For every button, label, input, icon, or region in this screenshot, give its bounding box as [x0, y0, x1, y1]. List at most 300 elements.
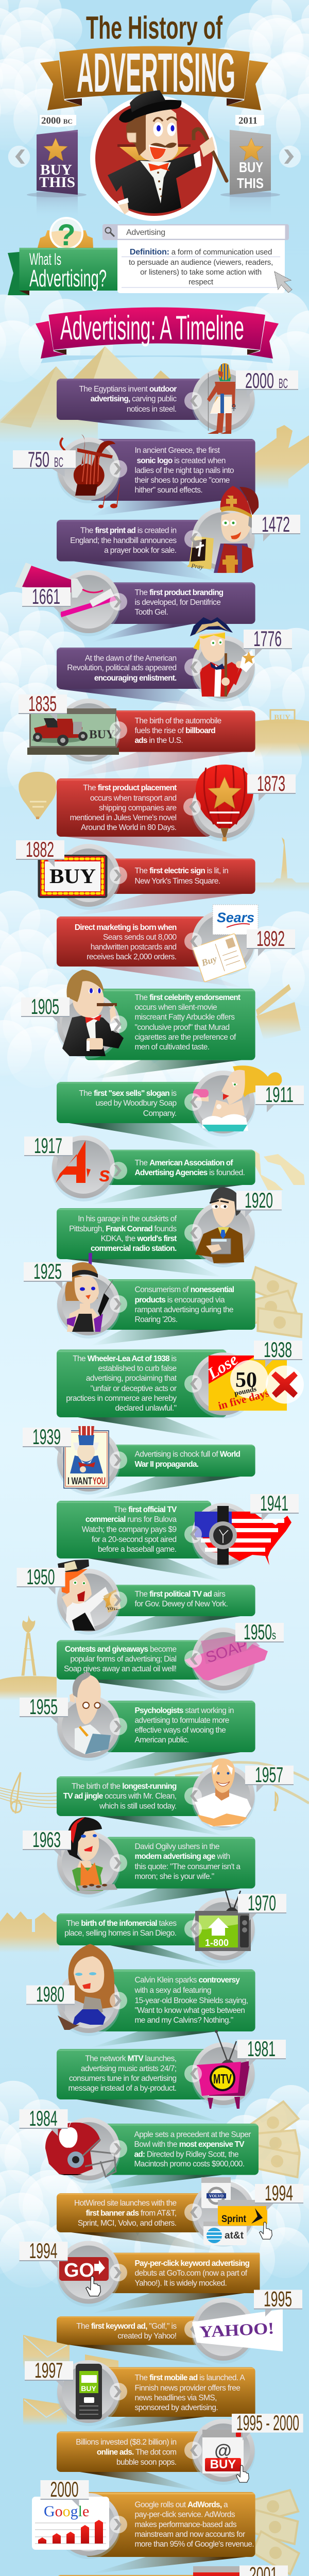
- icon: diet advert: 50: [235, 1368, 257, 1392]
- date label: 2000: [50, 2477, 78, 2501]
- text: cigarettes are the preference of: [135, 1033, 236, 1042]
- text: Pittsburgh, Frank Conrad founds: [69, 1225, 177, 1233]
- date label: 1957: [255, 1762, 283, 1787]
- text: Contests and giveaways become: [65, 1645, 176, 1654]
- event: 1981: [57, 2030, 286, 2109]
- text: Calvin Klein sparks controversy: [135, 1976, 240, 1985]
- text: The first print ad is created in: [80, 527, 176, 535]
- icon: diet advert: [203, 1350, 287, 1412]
- connector: [91, 2175, 222, 2191]
- text: miscreant Fatty Arbuckle offers: [135, 1013, 235, 1022]
- text: [135, 1706, 234, 1744]
- text: "Want to know what gets between: [135, 2006, 245, 2015]
- flag: buy this 2011: THIS: [237, 175, 264, 191]
- text: Psychologists start working in: [135, 1706, 234, 1715]
- text: [67, 654, 177, 683]
- text: practices in commerce are hereby: [66, 1394, 177, 1403]
- icon: bishop: Pray: [191, 562, 204, 570]
- icon: housewife: [66, 1817, 117, 1891]
- icon: psychologist: [70, 1672, 111, 1754]
- text: The first keyword ad, "Golf," is: [76, 2322, 177, 2331]
- event: 1925: [24, 1253, 255, 1338]
- panel: [103, 2124, 259, 2175]
- text: commercial runs for Bulova: [85, 1515, 177, 1524]
- text: moron; she is your wife.": [135, 1872, 214, 1881]
- text: [64, 1645, 177, 1673]
- text: with a sexy ad featuring: [134, 1986, 211, 1995]
- text: Yahoo!). It is widely mocked.: [135, 2279, 227, 2287]
- date label: [40, 2477, 89, 2507]
- event: 1995-2000: [57, 2411, 303, 2485]
- text: men of cultivated taste.: [135, 1043, 209, 1052]
- text: The first mobile ad is launched. A: [135, 2374, 245, 2382]
- connector: [91, 1477, 241, 1500]
- icon: Uncle Sam poster: YOU: [93, 1476, 106, 1487]
- connector: [91, 501, 220, 516]
- event: 2000: [32, 2477, 255, 2559]
- scenery: envelopes: [23, 2335, 118, 2426]
- text: [74, 2199, 176, 2228]
- text: Macintosh promo costs $900,000.: [134, 2160, 245, 2168]
- date label: [254, 2286, 302, 2316]
- event: 1776: [57, 617, 292, 702]
- date label: [252, 512, 300, 541]
- icon: billboard with car: BUY: [89, 728, 115, 741]
- panel: [89, 439, 255, 501]
- scenery: oil well: [0, 1615, 57, 1700]
- date label: [250, 1491, 299, 1521]
- panel: [57, 379, 206, 420]
- text: hither" sound effects.: [135, 486, 202, 495]
- text: occurs when transport and: [90, 794, 176, 803]
- icon: radio man: [195, 1187, 244, 1263]
- date label: 1994: [29, 2239, 58, 2263]
- text: ladies of the night tap nails into: [135, 466, 234, 475]
- text: [135, 1159, 245, 1177]
- event: 1873: [57, 765, 296, 841]
- date label: [22, 584, 71, 614]
- text: established to curb false: [98, 1364, 176, 1373]
- date label: [255, 2181, 303, 2211]
- text: for a 20-second spot aired: [92, 1535, 176, 1544]
- date label: [247, 771, 296, 801]
- icon: @ buy window: BUY: [210, 2458, 236, 2471]
- icon: television: [195, 1891, 251, 1951]
- text: ad: Directed by Ridley Scott, the: [134, 2150, 238, 2159]
- panel: [57, 1350, 227, 1417]
- panel: definition search box: [102, 224, 292, 293]
- date label: 1955: [29, 1694, 58, 1719]
- date label: [237, 2037, 286, 2066]
- date label: [255, 1082, 304, 1112]
- date label: BC: [54, 454, 63, 470]
- panel: [85, 989, 255, 1060]
- event: 2001: [57, 2563, 288, 2576]
- text: makes performance-based ads: [135, 2520, 237, 2529]
- panel: [106, 1837, 255, 1889]
- connector: [65, 752, 244, 778]
- event: 1892: [57, 905, 295, 982]
- icon: red pop-up: [193, 2566, 243, 2576]
- event: 1963: [23, 1817, 255, 1897]
- text: [66, 1354, 177, 1413]
- icon: soap bar: SOAP: [204, 1636, 250, 1667]
- icon: cursor: [274, 272, 292, 293]
- text: declared unlawful.": [115, 1404, 177, 1413]
- text: The first electric sign is lit, in: [135, 867, 228, 875]
- date label: 1882: [26, 837, 54, 861]
- date label: [23, 1827, 71, 1857]
- icon: billboard with car: [27, 708, 119, 755]
- text: modern advertising age with: [135, 1852, 230, 1861]
- icon: Uncle Sam poster: I WANT: [67, 1476, 92, 1487]
- text: encouraging enlistment.: [94, 674, 177, 683]
- connector: [69, 894, 243, 917]
- event: 1661: [15, 563, 255, 636]
- text: [69, 1215, 177, 1253]
- scenery: pyramids: [0, 346, 170, 443]
- event: 1995 Yahoo: [57, 2286, 302, 2364]
- date label: 1939: [32, 1425, 61, 1449]
- text: products is encouraged via: [135, 1296, 225, 1304]
- text: At the dawn of the American: [85, 654, 176, 663]
- text: Tooth Gel.: [135, 608, 168, 617]
- event: 1984: [20, 2106, 259, 2183]
- icon: Sprint banner: Sprint: [221, 2214, 247, 2225]
- date label: [24, 1133, 73, 1163]
- icon: lyre and notes: [61, 434, 119, 508]
- text: first banner ads from AT&T,: [86, 2209, 176, 2217]
- event: 1950: [16, 1560, 255, 1635]
- text: [135, 2374, 245, 2412]
- text: TV ad jingle occurs with Mr. Clean,: [63, 1792, 176, 1801]
- flag: buy this 2011: [220, 130, 280, 219]
- text: before a baseball game.: [98, 1545, 176, 1554]
- text: [64, 1919, 177, 1938]
- event: 1994 pay-per-click: [20, 2239, 260, 2307]
- panel: [57, 1208, 211, 1259]
- panel: [57, 1082, 211, 1123]
- date label: [247, 926, 295, 956]
- date label: 2000: [245, 368, 274, 393]
- event: 1980: [26, 1944, 255, 2036]
- ribbon: what is advertising: What Is: [29, 250, 61, 268]
- date label: 1980: [36, 1982, 64, 2006]
- icon: MTV television: [197, 2030, 250, 2109]
- arrow: previous: [8, 146, 30, 167]
- text: [79, 1089, 177, 1118]
- icon: Sears stamp: [213, 905, 258, 935]
- scenery: clapperboard: [256, 984, 301, 1040]
- panel: [57, 1776, 211, 1816]
- icon: colonial soldier: [190, 617, 255, 697]
- connector: [98, 1816, 225, 1836]
- ribbon: what is advertising: Advertising?: [29, 265, 107, 292]
- text: [135, 717, 221, 745]
- icon: Sears stamp: Sears: [217, 910, 254, 925]
- arrow: next: [279, 146, 301, 167]
- connector: [71, 2232, 222, 2252]
- text: The birth of the automobile: [135, 717, 221, 725]
- definition text: or listeners) to take some action with: [140, 268, 262, 277]
- icon: 4A's logo: s: [99, 1163, 110, 1186]
- text: In ancient Greece, the first: [135, 446, 220, 455]
- text: [135, 588, 224, 617]
- scenery: money: [248, 2489, 301, 2574]
- panel: [57, 520, 206, 562]
- text: shipping companies are: [99, 804, 176, 812]
- icon: soap bar: [184, 1634, 268, 1681]
- definition text: [117, 240, 285, 293]
- icon: AT&T banner: [203, 2222, 247, 2245]
- text: The birth of the infomercial takes: [66, 1919, 177, 1928]
- event: 1941: [57, 1491, 299, 1569]
- text: HotWired site launches with the: [74, 2199, 176, 2208]
- date label: 1776: [253, 626, 282, 651]
- text: [79, 385, 177, 414]
- text: The Egyptians invent outdoor: [79, 385, 177, 394]
- panel: [106, 2367, 255, 2417]
- text: Around the World in 80 Days.: [81, 823, 176, 832]
- text: In his garage in the outskirts of: [78, 1215, 177, 1223]
- connector: [65, 837, 245, 858]
- scenery: hands: [254, 1150, 305, 1190]
- date label: 1892: [256, 926, 285, 951]
- text: Consumerism of nonessential: [135, 1285, 234, 1294]
- panel: [106, 1445, 255, 1477]
- icon: 4A's logo: [56, 1141, 110, 1186]
- text: The American Association of: [135, 1159, 233, 1167]
- icon: Volvo banner: [201, 2177, 231, 2208]
- ribbon: Advertising: [40, 41, 268, 110]
- date label: [238, 1891, 286, 1921]
- connector: [91, 1616, 241, 1639]
- icon: Mr. Clean: [194, 1758, 251, 1826]
- text: [134, 1976, 248, 2025]
- text: sponsored by advertising.: [135, 2403, 218, 2412]
- icon: hot-air balloon: [196, 765, 253, 841]
- event: 1917: [24, 1133, 255, 1201]
- date label: [16, 837, 64, 867]
- badge: question mark: [38, 217, 93, 252]
- text: commercial radio station.: [91, 1244, 177, 1253]
- text: Soap gives away an actual oil well!: [64, 1665, 176, 1673]
- connector: [91, 2031, 217, 2047]
- date label: [239, 2563, 288, 2576]
- date label: [13, 447, 76, 477]
- icon: mobile phone: [76, 2364, 102, 2419]
- text: online ads. The dot com: [97, 2448, 176, 2456]
- text: used by Woodbury Soap: [96, 1099, 176, 1108]
- panel: [85, 2492, 255, 2557]
- text: Company.: [143, 1109, 176, 1118]
- date label: 1472: [262, 512, 290, 536]
- text: "unfair or deceptive acts or: [90, 1384, 177, 1393]
- text: [134, 2130, 251, 2168]
- date label: 1925: [33, 1259, 62, 1283]
- connector: [69, 1123, 221, 1149]
- date label: [236, 1188, 282, 1217]
- date label: [21, 994, 70, 1024]
- date tag: 2011: [235, 115, 264, 127]
- title: [40, 10, 268, 110]
- connector: [72, 561, 217, 581]
- icon: go button: GO: [64, 2260, 94, 2281]
- text: ads in the U.S.: [135, 736, 183, 745]
- date label: 1917: [34, 1133, 62, 1158]
- text: Advertising is chock full of World: [135, 1450, 240, 1459]
- text: Pay-per-click keyword advertising: [135, 2259, 250, 2268]
- text: message instead of a by-product.: [68, 2084, 176, 2093]
- text: The first product branding: [135, 588, 224, 597]
- date label: [16, 1565, 65, 1595]
- text: Finnish news provider offers free: [135, 2384, 240, 2393]
- icon: flapper: [65, 1253, 113, 1332]
- search bar: [102, 224, 289, 240]
- date label: [26, 1982, 75, 2012]
- text: Direct marketing is born when: [75, 923, 177, 932]
- text: fuels the rise of billboard: [135, 726, 215, 735]
- connector: [77, 2099, 222, 2123]
- connector: [91, 1060, 242, 1079]
- text: Billions invested ($8.2 billion) in: [76, 2438, 176, 2447]
- icon: diet advert: in five days: [217, 1386, 270, 1412]
- panel: [57, 1640, 211, 1680]
- connector: [110, 1945, 225, 1969]
- date label: 750: [28, 447, 49, 471]
- connector: [91, 1752, 241, 1775]
- date label: 1997: [35, 2358, 63, 2382]
- icon: Uncle Sam poster: [64, 1426, 109, 1488]
- search bar: Advertising: [126, 228, 165, 237]
- text: which is still used today.: [99, 1802, 176, 1810]
- text: [70, 784, 177, 832]
- text: sonic logo is created when: [137, 456, 226, 465]
- icon: cigar man: [62, 970, 124, 1056]
- panel: [57, 2049, 211, 2099]
- event: 1939: [23, 1425, 255, 1495]
- icon: Yahoo logo: [192, 2309, 283, 2351]
- text: [75, 923, 177, 961]
- date label: [25, 2358, 73, 2388]
- panel: [93, 1970, 255, 2031]
- event: 1472: [57, 486, 300, 573]
- text: advertising, carving public: [91, 395, 177, 403]
- panel: [57, 2575, 206, 2576]
- scenery: music staff: [0, 1762, 309, 1814]
- text: created by Yahoo!: [117, 2332, 176, 2341]
- text: place, selling homes in San Diego.: [64, 1929, 176, 1938]
- text: advertising music artists 24/7;: [81, 2064, 176, 2073]
- text: England; the handbill announces: [70, 536, 177, 545]
- text: Google rolls out AdWords, a: [135, 2501, 228, 2510]
- text: Advertising Agencies is founded.: [135, 1168, 245, 1177]
- text: me and my Calvins? Nothing.": [135, 2016, 233, 2025]
- date label: [20, 2239, 68, 2268]
- text: mentioned in Jules Verne's novel: [70, 814, 177, 822]
- panel: [106, 1585, 255, 1616]
- connector: [91, 1889, 241, 1912]
- connector: [91, 2293, 244, 2314]
- ribbon: what is advertising: [8, 248, 117, 295]
- connector: [57, 689, 215, 708]
- connector: [80, 2472, 203, 2492]
- date label: [24, 1259, 72, 1289]
- text: [135, 1450, 240, 1469]
- text: "conclusive proof" that Murad: [135, 1023, 230, 1032]
- flag: buy this 2000 BC: [27, 130, 87, 219]
- date label: 1981: [247, 2037, 276, 2061]
- connector: [77, 1680, 222, 1700]
- mascot circle: [90, 90, 227, 221]
- date label: [20, 2106, 68, 2136]
- event: 1950s: [57, 1620, 284, 1693]
- panel: [103, 582, 255, 624]
- text: effective ways of wooing the: [135, 1726, 226, 1735]
- panel: [57, 1913, 211, 1945]
- connector: [91, 2417, 205, 2431]
- text: bubble soon pops.: [116, 2458, 176, 2467]
- text: their shoes to produce "come: [135, 476, 230, 485]
- icon: Volvo banner: VOLVO: [209, 2194, 224, 2198]
- icon: Sprint banner: [218, 2200, 272, 2239]
- text: [135, 2501, 254, 2549]
- event: 1955: [20, 1672, 255, 1761]
- scenery: ruins: [255, 425, 309, 489]
- panel: [57, 917, 211, 967]
- date label: [19, 691, 67, 721]
- icon: US flag map: [195, 1512, 291, 1565]
- scenery: houses: [0, 1911, 59, 1953]
- event: 1911: [57, 1065, 304, 1137]
- text: [135, 1842, 241, 1881]
- date label: 1835: [28, 691, 57, 716]
- text: New York's Times Square.: [135, 877, 220, 886]
- text: consumers tune in for advertising: [69, 2074, 176, 2083]
- text: [76, 2322, 177, 2341]
- date label: [254, 1337, 302, 1367]
- icon: wrist watch: [209, 1506, 237, 1565]
- connector: [91, 2557, 246, 2574]
- icon: television: 1-800: [205, 1938, 229, 1948]
- scenery: money: [246, 1267, 304, 1337]
- text: [135, 993, 241, 1052]
- text: [63, 1782, 177, 1810]
- connector: [70, 2345, 217, 2367]
- panel: [57, 1501, 211, 1558]
- connector: [75, 1417, 225, 1441]
- text: a prayer book for sale.: [104, 546, 176, 555]
- icon: electric sign: [38, 855, 107, 898]
- text: Roaring '20s.: [135, 1315, 178, 1324]
- ribbon: Advertising: A Timeline: [36, 307, 279, 363]
- badge: question mark: ?: [57, 218, 76, 252]
- icon: Google chart: [32, 2497, 109, 2550]
- icon: postcard: Buy: [200, 953, 218, 969]
- panel: [106, 1701, 255, 1752]
- text: The first official TV: [114, 1505, 177, 1514]
- text: is developed, for Dentifrice: [135, 598, 220, 607]
- definition text: respect: [188, 278, 214, 286]
- text: more than 95% of Google's revenue.: [135, 2540, 254, 2549]
- scenery: statue of liberty: [255, 837, 309, 891]
- scenery: hill and buy sign: BUY: [274, 714, 290, 722]
- text: advertising, proclaiming that: [86, 1374, 177, 1383]
- icon: Google chart: Google: [44, 2503, 89, 2520]
- text: for Gov. Dewey of New York.: [135, 1600, 228, 1608]
- connector: [91, 624, 193, 642]
- definition text: to persuade an audience (viewers, readers,: [129, 258, 273, 267]
